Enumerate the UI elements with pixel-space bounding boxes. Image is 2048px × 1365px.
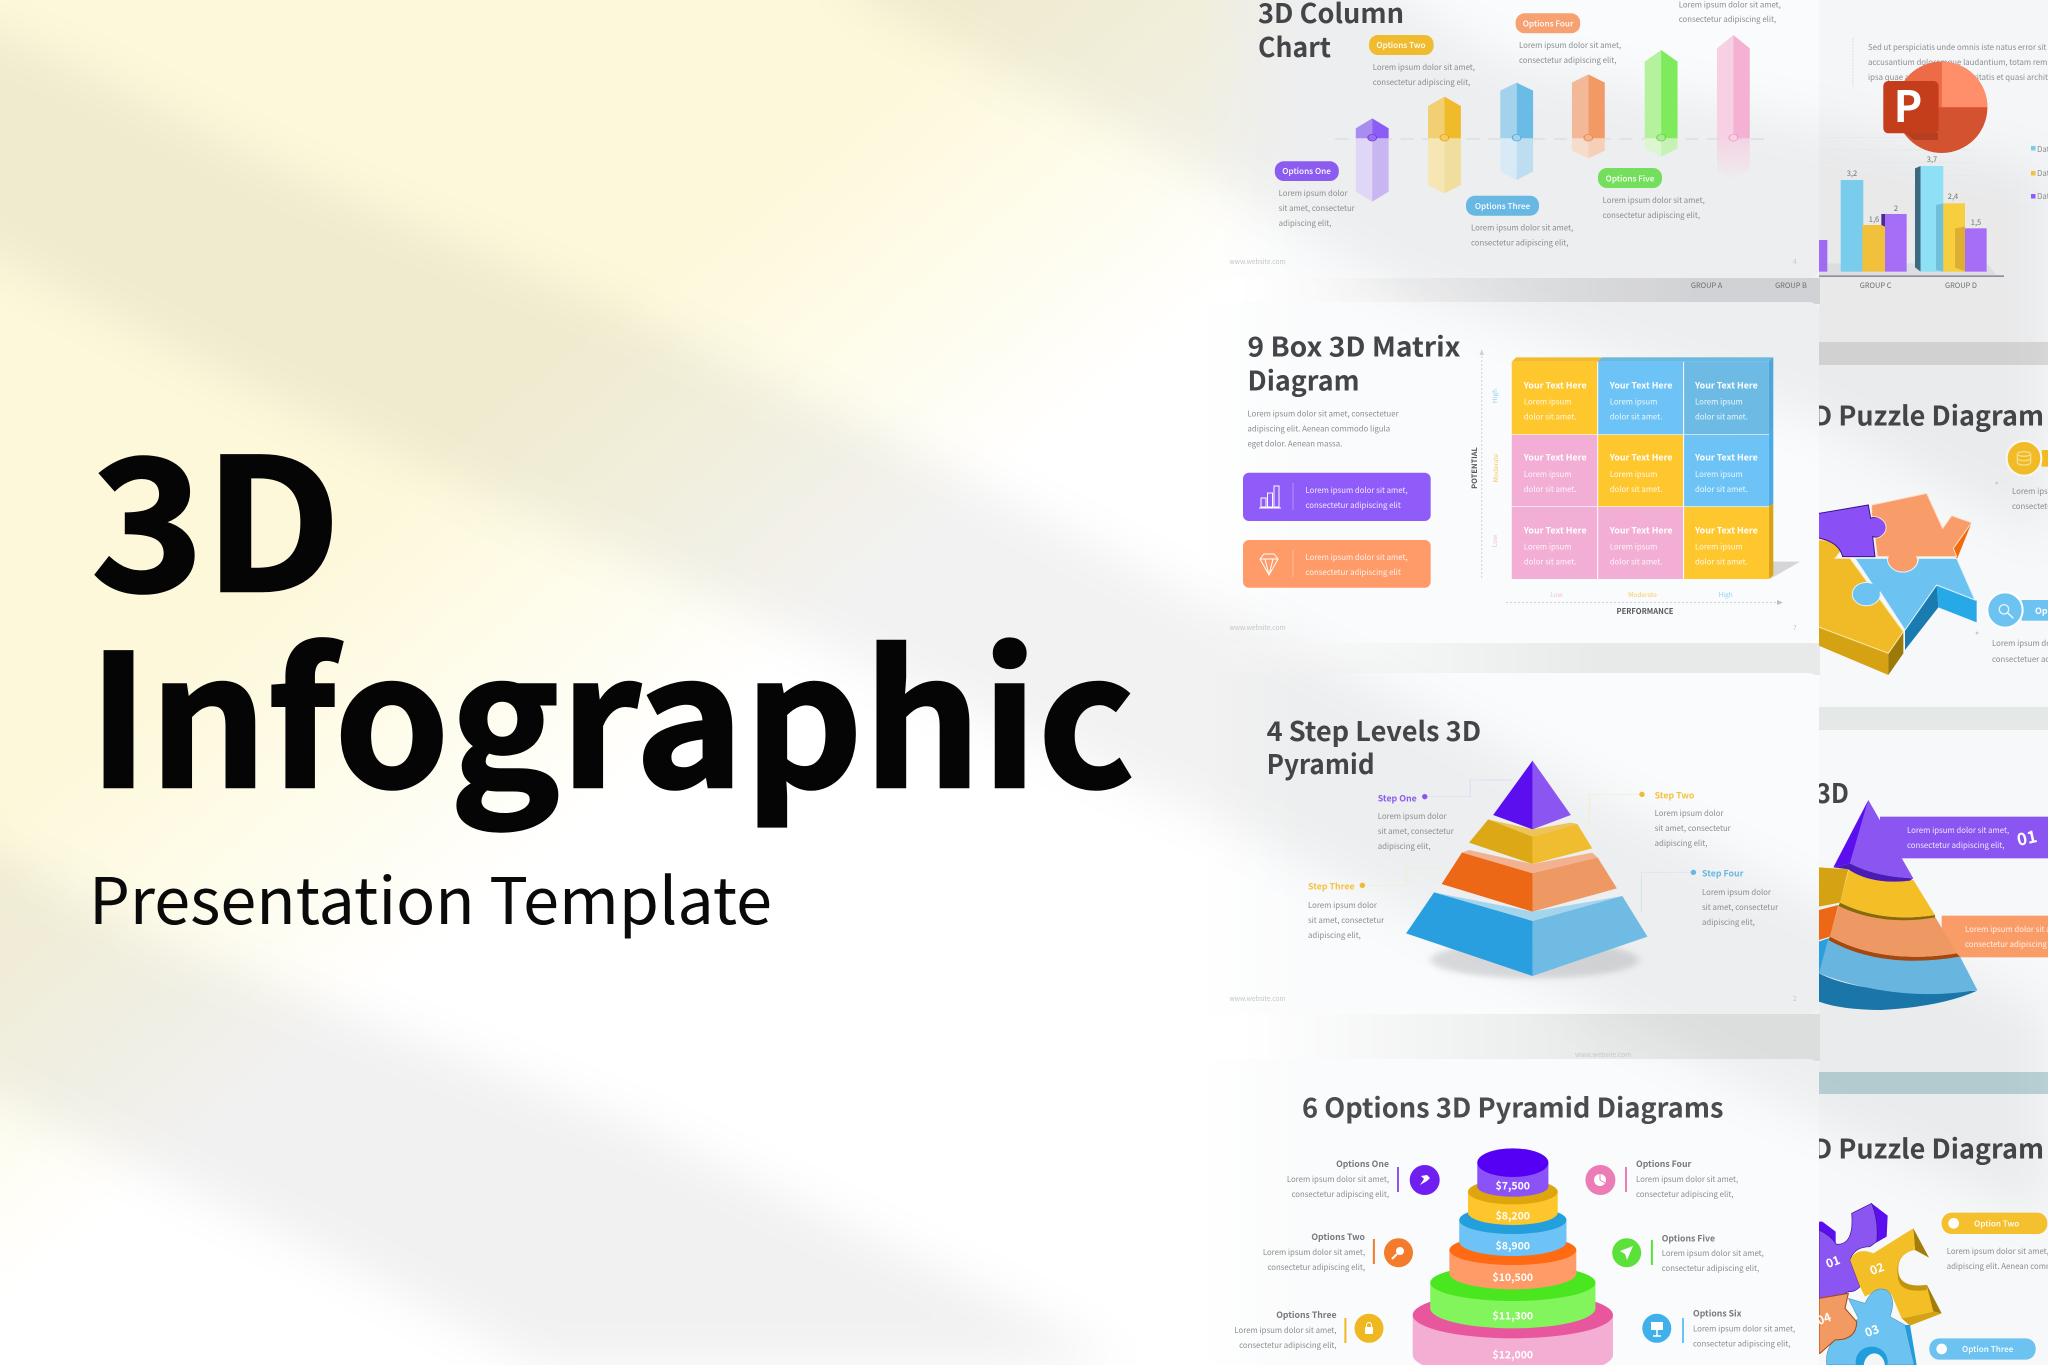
group axis labels: GROUP A (1691, 280, 1723, 291)
horizontal axis: Low (1550, 589, 1564, 599)
option three: consectetur adipiscing elit, (1239, 1340, 1337, 1351)
back slide: 3D cone pyramid: 01 (2014, 822, 2039, 851)
pyramid graphic (1360, 761, 1696, 978)
slide title (1248, 326, 1460, 399)
nine box matrix: Lorem ipsum (1695, 542, 1743, 553)
slide title: Pyramid (1267, 743, 1375, 782)
icon: PowerPoint logo (1883, 62, 1987, 153)
horizontal axis: High (1719, 589, 1733, 599)
option five: Options Five (1662, 1231, 1715, 1244)
slide title: Chart (1258, 26, 1331, 65)
back slide: puzzle diagram (1819, 404, 2048, 675)
nine box matrix: Lorem ipsum (1695, 396, 1743, 408)
option two: Lorem ipsum dolor sit amet, (1263, 1247, 1365, 1258)
option labels: Options Two (1376, 39, 1426, 51)
option labels: Options Three (1475, 200, 1530, 212)
purple callout with bar icon: consectetur adipiscing elit (1306, 500, 1401, 511)
step three label: Lorem ipsum dolor (1308, 900, 1378, 911)
slide: 3D column chart (1229, 0, 1797, 266)
nine box matrix: Lorem ipsum (1524, 469, 1571, 480)
vertical axis: Low (1489, 534, 1499, 547)
option labels: Options One (1282, 165, 1331, 177)
orange callout with diamond icon (1243, 540, 1431, 588)
option six: Options Six (1693, 1307, 1742, 1320)
hero title: Infographic (88, 575, 1135, 840)
stacked cylinder pyramid: $7,500 (1496, 1178, 1530, 1194)
slide title: Diagram (1248, 360, 1360, 399)
main slide panels (1200, 0, 1819, 1365)
option descriptions: consectetur adipiscing elit, (1679, 14, 1776, 25)
back slide: colored puzzle with options: 04 (1814, 1308, 1833, 1329)
footer: www.website.com (1229, 256, 1286, 266)
back slide: bar chart: 2,4 (1948, 191, 1958, 202)
back slide: colored puzzle with options: 01 (1823, 1251, 1842, 1272)
vertical axis (1469, 349, 1500, 580)
step one label (1378, 792, 1455, 852)
purple callout with bar icon: Lorem ipsum dolor sit amet, (1306, 485, 1408, 496)
step two label: sit amet, consectetur (1655, 823, 1732, 834)
back slide: bar chart: ipsa quae ab illo inventore veritatis et quasi archite (1868, 72, 2048, 83)
horizontal axis (1506, 589, 1783, 617)
option four (1585, 1157, 1738, 1200)
step four label (1702, 866, 1779, 928)
option descriptions: consectetur adipiscing elit, (1373, 77, 1470, 88)
step two label: Step Two (1655, 788, 1695, 802)
option three: Options Three (1276, 1308, 1337, 1321)
step four label: Step Four (1702, 866, 1744, 880)
option descriptions: consectetur adipiscing elit, (1603, 210, 1700, 221)
option descriptions: consectetur adipiscing elit, (1519, 55, 1616, 66)
footer (1229, 622, 1797, 632)
option five: consectetur adipiscing elit, (1662, 1263, 1759, 1274)
footer: 4 (1793, 256, 1797, 266)
step two label: adipiscing elit, (1655, 838, 1707, 849)
slide title: 6 Options 3D Pyramid Diagrams (1302, 1086, 1724, 1125)
option descriptions: Lorem ipsum dolor sit amet, (1373, 62, 1475, 73)
vertical axis: High (1489, 389, 1499, 403)
option labels (1275, 13, 1662, 216)
option labels: Options Five (1606, 172, 1655, 184)
option descriptions: consectetur adipiscing elit, (1471, 238, 1568, 248)
option descriptions: Lorem ipsum dolor sit amet, (1519, 40, 1621, 51)
nine box matrix: Lorem ipsum (1610, 469, 1657, 480)
footer (1229, 993, 1797, 1003)
slide: 4 step levels pyramid (1229, 710, 1797, 1059)
option one: consectetur adipiscing elit, (1292, 1189, 1389, 1200)
back slide: colored puzzle with options: 02 (1867, 1258, 1886, 1279)
back slide: 3D cone pyramid: consectetur adipiscing elit, (1907, 840, 2004, 851)
slide: 9 box 3D matrix (1229, 326, 1800, 632)
nine box matrix: dolor sit amet. (1695, 484, 1748, 495)
purple callout with bar icon (1243, 473, 1431, 521)
step one label: Step One (1378, 792, 1417, 804)
nine box matrix: Lorem ipsum (1524, 542, 1571, 553)
nine box matrix: dolor sit amet. (1524, 557, 1577, 568)
step one label: Lorem ipsum dolor (1378, 811, 1448, 822)
option descriptions: Lorem ipsum dolor sit amet, (1471, 222, 1573, 234)
nine box matrix: Your Text Here (1609, 450, 1673, 464)
stacked cylinder pyramid: $11,300 (1493, 1308, 1533, 1324)
nine box matrix: Your Text Here (1523, 378, 1587, 392)
stacked cylinder pyramid: $8,200 (1496, 1208, 1530, 1224)
back slide: colored puzzle with options: 3D Puzzle Diagram (1797, 1127, 2044, 1166)
right column slide backgrounds (1819, 0, 2048, 1365)
back slide: colored puzzle with options (1819, 1136, 2048, 1365)
slide: 6 options pyramid (1234, 1086, 1795, 1365)
gaps between main slides (1240, 278, 1820, 1061)
step one label: adipiscing elit, (1378, 841, 1431, 852)
nine box matrix: Lorem ipsum (1524, 396, 1571, 408)
option one: Lorem ipsum dolor sit amet, (1287, 1174, 1389, 1185)
nine box matrix: Your Text Here (1609, 524, 1673, 537)
back slide: bar chart: 2 (1894, 203, 1898, 214)
nine box matrix: dolor sit amet. (1610, 412, 1662, 422)
option six (1642, 1307, 1795, 1350)
option five: Lorem ipsum dolor sit amet, (1662, 1248, 1764, 1259)
nine box matrix: Your Text Here (1523, 450, 1587, 464)
option one (1287, 1157, 1440, 1200)
back slide: puzzle diagram: 3D Puzzle Diagram (1797, 395, 2044, 434)
back slide: colored puzzle with options: Lorem ipsum dolor sit amet, (1947, 1246, 2048, 1257)
option descriptions (1279, 0, 1781, 248)
vertical axis: Moderate (1490, 453, 1500, 482)
back slide: bar chart: Sed ut perspiciatis unde omnis iste natus error sit v (1868, 42, 2048, 53)
back slide: bar chart (1816, 38, 2048, 277)
option two: consectetur adipiscing elit, (1268, 1262, 1365, 1273)
nine box matrix: dolor sit amet. (1695, 412, 1748, 422)
option descriptions: sit amet, consectetur (1279, 203, 1356, 214)
hero title (88, 379, 1135, 840)
option three: Lorem ipsum dolor sit amet, (1234, 1325, 1337, 1336)
back slide: 3D cone pyramid: consectetur adipiscing (1965, 939, 2047, 950)
vertical axis: POTENTIAL (1469, 446, 1480, 489)
stacked cylinder pyramid: $12,000 (1493, 1348, 1533, 1362)
option six: consectetur adipiscing elit, (1693, 1339, 1790, 1350)
back slide: puzzle diagram: Op (2035, 604, 2048, 617)
footer: www.website.com (1229, 622, 1286, 632)
nine box matrix: dolor sit amet. (1524, 412, 1577, 422)
nine box matrix: Your Text Here (1609, 378, 1673, 392)
nine box matrix: Your Text Here (1694, 378, 1758, 392)
option four: Lorem ipsum dolor sit amet, (1636, 1174, 1738, 1185)
hero title: 3D (91, 379, 341, 644)
step four label: adipiscing elit, (1702, 917, 1755, 928)
step four label: Lorem ipsum dolor (1702, 887, 1772, 898)
step three label: sit amet, consectetur (1308, 915, 1385, 926)
stacked cylinder pyramid: $8,900 (1496, 1238, 1530, 1254)
option four: Options Four (1636, 1157, 1692, 1170)
stacked cylinder pyramid: $10,500 (1493, 1270, 1533, 1285)
back slide: colored puzzle with options: Option Three (1962, 1343, 2014, 1355)
back slide: 3D cone pyramid (1816, 772, 2048, 1019)
option two (1263, 1230, 1413, 1273)
back slide: colored puzzle with options: 03 (1862, 1320, 1881, 1341)
group axis labels (1691, 280, 1977, 291)
step three label: adipiscing elit, (1308, 930, 1361, 941)
back slide: 3D cone pyramid: Lorem ipsum dolor sit a (1965, 924, 2048, 935)
icon: PowerPoint logo: P (1894, 73, 1922, 135)
group axis labels: GROUP C (1860, 280, 1892, 291)
nine box matrix: dolor sit amet. (1524, 484, 1577, 495)
nine box matrix: Your Text Here (1694, 450, 1758, 464)
slide title (1258, 0, 1404, 65)
option descriptions: adipiscing elit, (1279, 218, 1331, 229)
option descriptions: Lorem ipsum dolor (1279, 188, 1349, 199)
horizontal axis: Moderate (1628, 589, 1657, 599)
slide title: 4 Step Levels 3D (1267, 710, 1481, 749)
option labels: Options Four (1523, 18, 1574, 30)
column shapes (1335, 35, 1770, 202)
orange callout with diamond icon: consectetur adipiscing elit (1306, 567, 1401, 578)
footer (1229, 256, 1797, 266)
step two label (1655, 788, 1732, 849)
footer: www.website.com (1229, 993, 1286, 1003)
step three label: Step Three (1308, 880, 1355, 892)
nine box matrix: Your Text Here (1523, 524, 1587, 537)
step four label: sit amet, consectetur (1702, 902, 1779, 913)
horizontal axis: PERFORMANCE (1617, 606, 1674, 617)
hero subtitle: Presentation Template (89, 851, 772, 943)
back slide: bar chart: 3,7 (1927, 154, 1937, 165)
intro text (1248, 408, 1400, 450)
back slide: colored puzzle with options: Option Two (1974, 1218, 2019, 1230)
intro text: eget dolor. Aenean massa. (1248, 438, 1342, 450)
nine box matrix: dolor sit amet. (1610, 557, 1662, 568)
back slide: bar chart: accusantium doloremque laudantium, totam rem a (1868, 57, 2048, 68)
nine box matrix: dolor sit amet. (1695, 557, 1748, 568)
intro text: Lorem ipsum dolor sit amet, consectetuer (1248, 408, 1400, 420)
option four: consectetur adipiscing elit, (1636, 1189, 1733, 1200)
step one label: sit amet, consectetur (1378, 826, 1455, 837)
option one: Options One (1336, 1157, 1389, 1170)
back slide: bar chart: 1,6 (1869, 214, 1879, 225)
nine box matrix: dolor sit amet. (1610, 484, 1662, 495)
step two label: Lorem ipsum dolor (1655, 808, 1725, 819)
orange callout with diamond icon: Lorem ipsum dolor sit amet, (1306, 552, 1408, 563)
option six: Lorem ipsum dolor sit amet, (1693, 1324, 1795, 1335)
intro text: adipiscing elit. Aenean commodo ligula (1248, 424, 1390, 434)
back slide: 3D cone pyramid: Lorem ipsum dolor sit amet, (1907, 825, 2009, 836)
back slide: bar chart: 1,5 (1971, 217, 1981, 228)
slide: 4 step levels pyramid: www.website.com (1575, 1049, 1631, 1059)
nine box matrix: Lorem ipsum (1610, 542, 1657, 553)
option two: Options Two (1311, 1230, 1366, 1243)
nine box matrix: Lorem ipsum (1610, 396, 1657, 408)
step three label (1308, 880, 1385, 941)
slide title (1267, 710, 1481, 782)
back slide: 3D cone pyramid: 3D (1816, 772, 1849, 811)
footer: 7 (1793, 622, 1797, 632)
nine box matrix (1512, 357, 1800, 579)
option descriptions: Lorem ipsum dolor sit amet, (1603, 195, 1705, 206)
group axis labels: GROUP B (1775, 280, 1807, 291)
option five (1612, 1231, 1764, 1274)
slide title: 9 Box 3D Matrix (1248, 326, 1460, 365)
back slide: bar chart: 3,2 (1847, 168, 1857, 179)
nine box matrix: Your Text Here (1694, 524, 1758, 537)
stacked cylinder pyramid (1413, 1148, 1613, 1365)
group axis labels: GROUP D (1945, 280, 1977, 291)
nine box matrix: Lorem ipsum (1695, 469, 1743, 480)
option three (1234, 1308, 1384, 1351)
footer: 2 (1793, 993, 1797, 1003)
